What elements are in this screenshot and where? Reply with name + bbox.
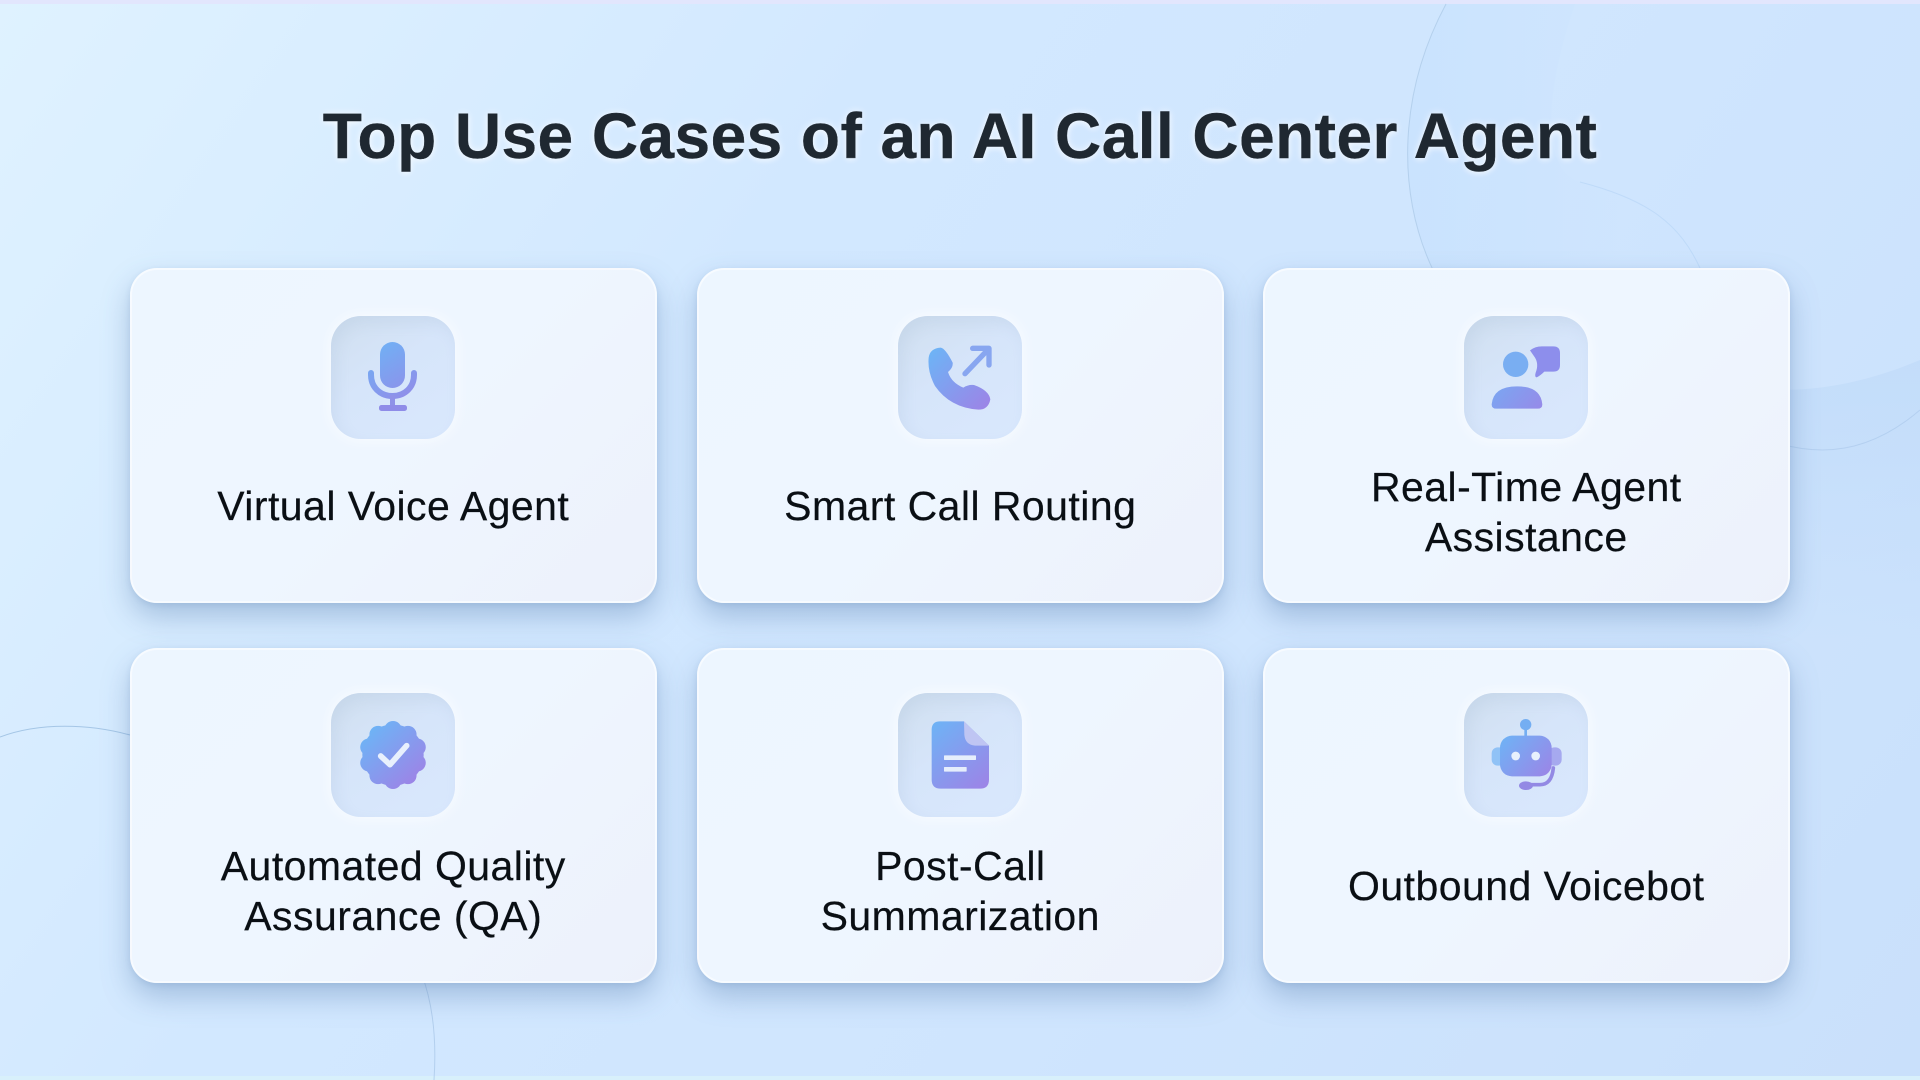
- label: Assistance: [1425, 514, 1628, 560]
- label: Automated Quality: [221, 843, 566, 889]
- card: Outbound Voicebot: [1263, 648, 1790, 982]
- label: [220, 843, 566, 939]
- label: [1371, 464, 1682, 560]
- icon: person with speech bubble: [1464, 316, 1588, 439]
- card: Automated Quality Assurance: [130, 648, 656, 982]
- icon: phone with arrow: [898, 316, 1022, 439]
- card: Virtual Voice Agent: [130, 268, 656, 602]
- label: Assurance (QA): [244, 893, 542, 939]
- icon: document: [898, 693, 1022, 816]
- title: Top Use Cases of an AI Call Center Agent: [323, 100, 1597, 172]
- label: Virtual Voice Agent: [217, 482, 569, 528]
- icon: microphone: [331, 316, 455, 439]
- icon: robot with headset: [1464, 693, 1588, 816]
- label: [821, 843, 1100, 939]
- label: Post-Call: [875, 843, 1045, 889]
- label: Summarization: [821, 893, 1100, 939]
- label: Smart Call Routing: [784, 482, 1136, 528]
- card: Post-Call Summarization: [697, 648, 1224, 982]
- label: Real-Time Agent: [1371, 464, 1682, 510]
- label: Outbound Voicebot: [1348, 863, 1704, 909]
- card: Smart Call Routing: [697, 268, 1224, 602]
- card: Real-Time Agent Assistance: [1263, 268, 1790, 602]
- icon: verified badge: [331, 693, 455, 816]
